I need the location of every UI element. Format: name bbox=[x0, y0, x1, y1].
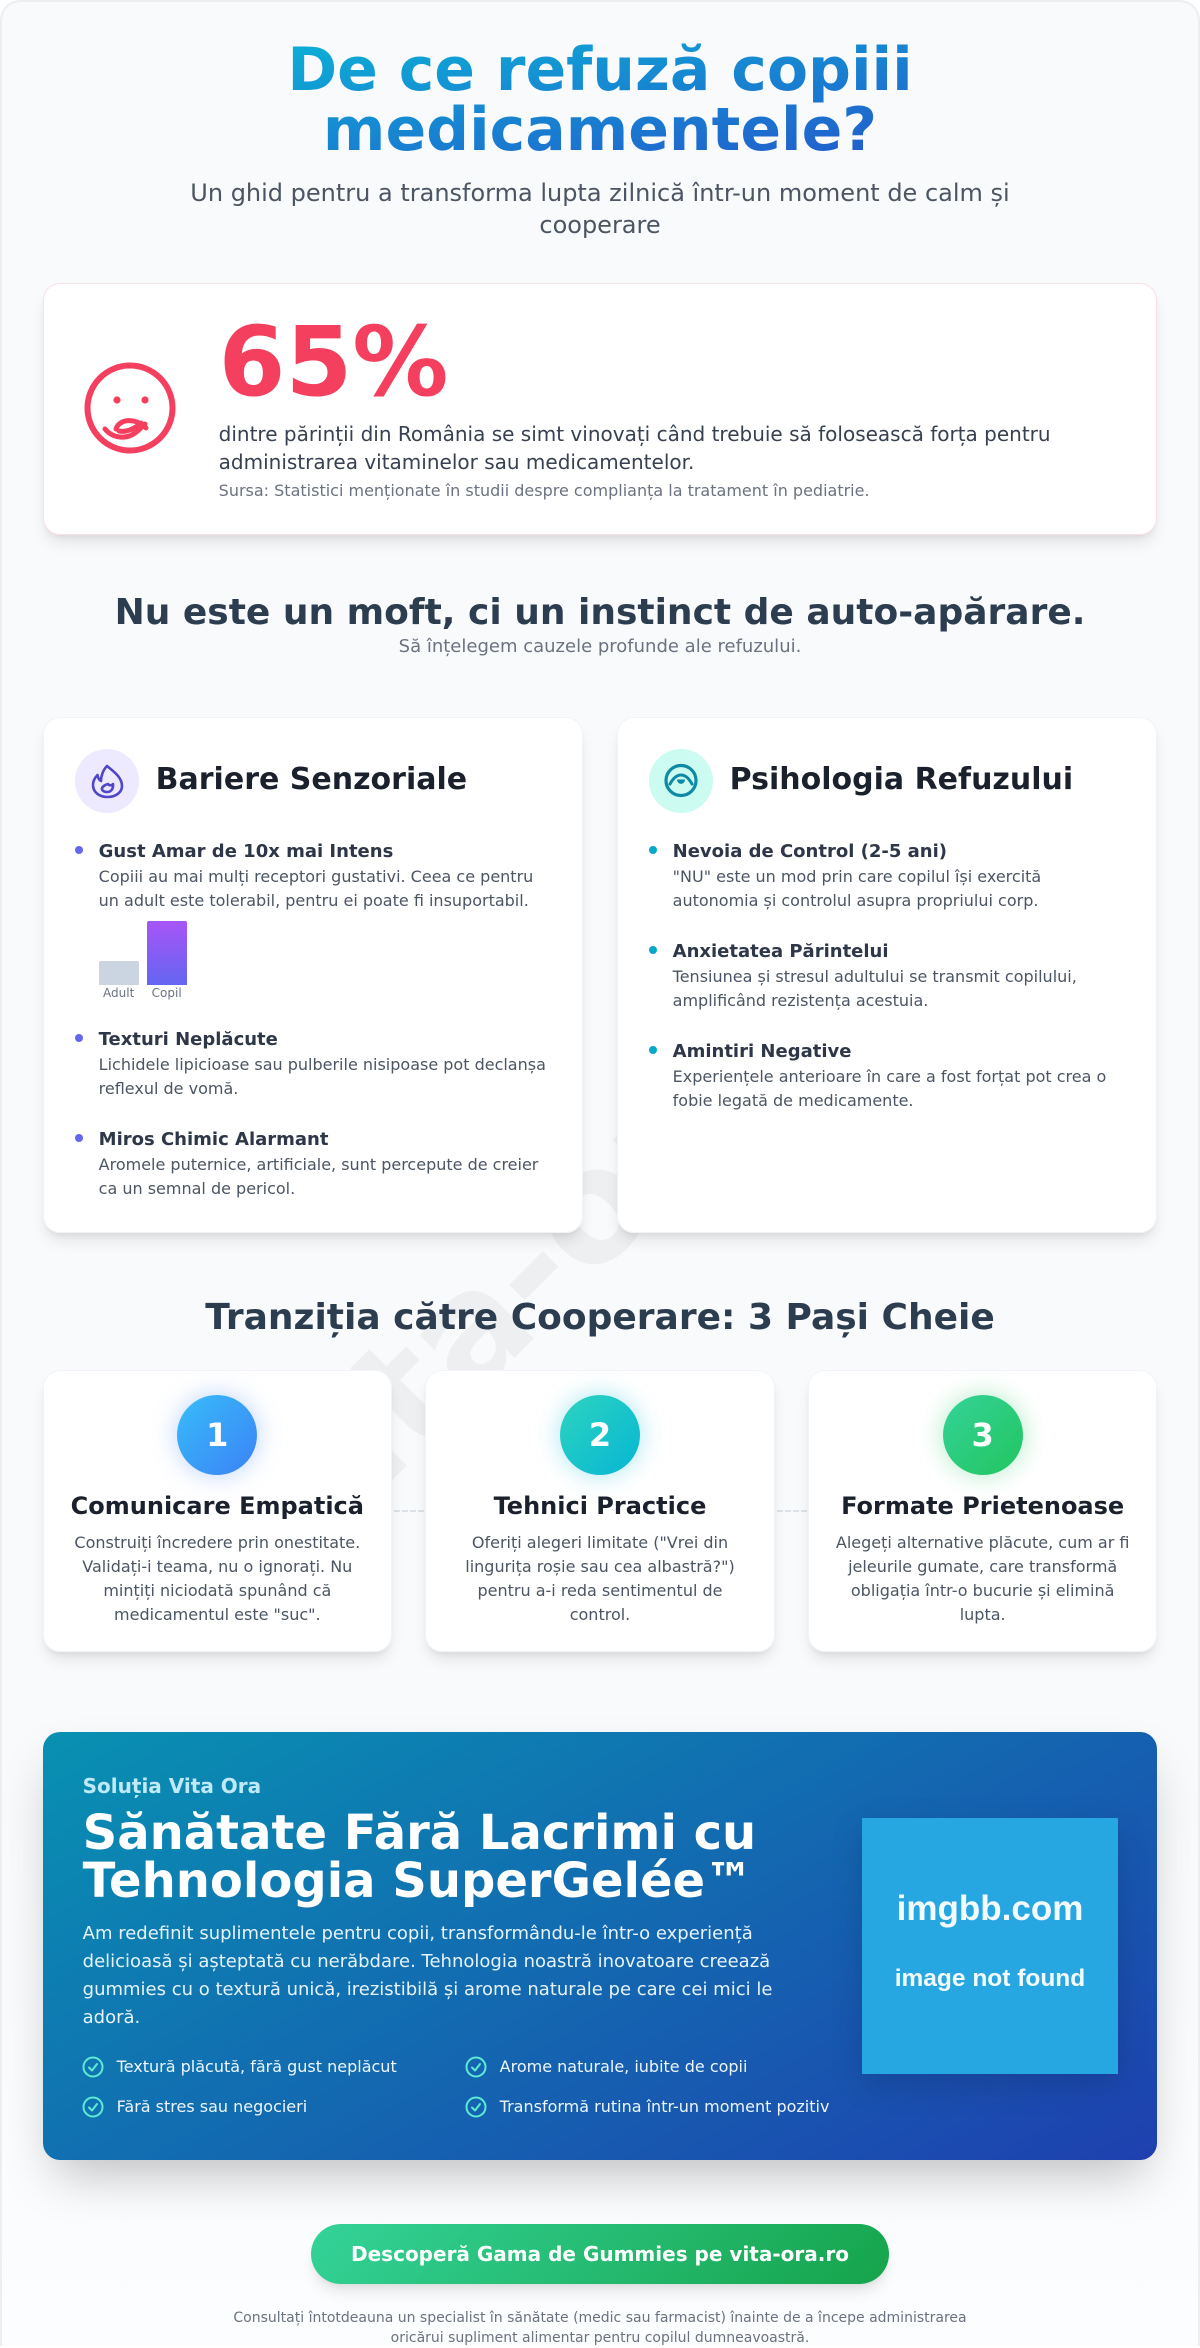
bullet: need for control bbox=[649, 841, 1041, 910]
step 1 card bbox=[43, 1370, 392, 1652]
subtitle: cooperare bbox=[539, 211, 661, 239]
feature: texture: Textură plăcută, fără gust neplăcut bbox=[117, 2057, 397, 2076]
bullet: textures: reflexul de vomă. bbox=[99, 1079, 238, 1098]
label: adult: Adult bbox=[103, 986, 134, 1000]
banner paragraph: Am redefinit suplimentele pentru copii, transformându-le într-o experiență bbox=[83, 1923, 753, 1944]
feature: natural flavours: Arome naturale, iubite de copii bbox=[500, 2057, 747, 2076]
step number: 2 bbox=[589, 1416, 611, 1454]
step text: jeleurile gumate, care transformă bbox=[848, 1557, 1117, 1576]
bullet: textures bbox=[75, 1029, 546, 1098]
panel: 65% statistic bbox=[43, 283, 1157, 535]
step text: Validați-i teama, nu o ignorați. Nu bbox=[82, 1557, 352, 1576]
step number bbox=[560, 1395, 640, 1475]
bullet: need for control: autonomia și controlul asupra propriului corp. bbox=[673, 891, 1038, 910]
step text: obligația într-o bucurie și elimină bbox=[851, 1581, 1114, 1600]
eyebrow label: Soluția Vita Ora bbox=[83, 1774, 261, 1798]
bar chart: adult vs child bbox=[99, 921, 187, 1000]
bullet: bitter taste: un adult este tolerabil, pentru ei poate fi insuportabil. bbox=[99, 891, 529, 910]
step number: 3 bbox=[972, 1416, 994, 1454]
bullet: bitter taste: Copiii au mai mulți receptori gustativi. Ceea ce pentru bbox=[99, 867, 533, 886]
section subheading: Să înțelegem cauzele profunde ale refuzului. bbox=[399, 636, 801, 657]
connector 2 bbox=[777, 1510, 807, 1512]
bullet: negative memories: Experiențele anterioare în care a fost forțat pot crea o bbox=[673, 1067, 1106, 1086]
feature: positive routine: Transformă rutina într-un moment pozitiv bbox=[500, 2097, 829, 2116]
step number: 1 bbox=[206, 1416, 228, 1454]
panel: sensory barriers bbox=[43, 717, 583, 1233]
connector 1 bbox=[394, 1510, 424, 1512]
image placeholder bbox=[862, 1818, 1118, 2074]
bullet: parent anxiety: amplificând rezistența acestuia. bbox=[673, 991, 928, 1010]
bullet: need for control: Nevoia de Control (2-5 ani) bbox=[673, 841, 947, 862]
icon: eye in circle bbox=[649, 749, 713, 813]
step text bbox=[465, 1533, 735, 1624]
step 2 card bbox=[425, 1370, 775, 1652]
call to action button: Descoperă Gama de Gummies pe vita-ora.ro bbox=[351, 2242, 849, 2266]
bullet: textures: Lichidele lipicioase sau pulberile nisipoase pot declanșa bbox=[99, 1055, 546, 1074]
bullet: negative memories: Amintiri Negative bbox=[673, 1041, 851, 1062]
bullet: chemical smell: Aromele puternice, artificiale, sunt percepute de creier bbox=[99, 1155, 538, 1174]
icon: flame bbox=[75, 749, 139, 813]
step text: pentru a-i reda sentimentul de bbox=[477, 1581, 722, 1600]
bullet: bitter taste bbox=[75, 841, 533, 1000]
bar: adult bbox=[99, 961, 139, 985]
disclaimer bbox=[233, 2310, 967, 2346]
step title: Comunicare Empatică bbox=[71, 1492, 364, 1520]
source note: Sursa: Statistici menționate în studii despre complianța la tratament în pediatrie. bbox=[219, 481, 870, 500]
title: De ce refuză copiii bbox=[287, 35, 913, 105]
disclaimer: Consultați întotdeauna un specialist în sănătate (medic sau farmacist) înainte de a începe administrarea bbox=[233, 2310, 967, 2326]
bullet: bitter taste: Gust Amar de 10x mai Intens bbox=[99, 841, 393, 862]
banner paragraph: delicioasă și așteptată cu nerăbdare. Tehnologia noastră inovatoare creează bbox=[83, 1951, 770, 1972]
section heading: transition: Tranziția către Cooperare: 3 Pași Cheie bbox=[205, 1297, 995, 1338]
title bbox=[287, 40, 913, 162]
step text: Alegeți alternative plăcute, cum ar fi bbox=[836, 1533, 1129, 1552]
bullet: chemical smell: Miros Chimic Alarmant bbox=[99, 1129, 328, 1150]
big number: 65% bbox=[219, 306, 448, 418]
step text: Construiți încredere prin onestitate. bbox=[74, 1533, 360, 1552]
statistic text: dintre părinții din România se simt vinovați când trebuie să folosească forța pentru bbox=[219, 422, 1051, 446]
bullet: parent anxiety bbox=[649, 941, 1077, 1010]
step text: lingurița roșie sau cea albastră?") bbox=[465, 1557, 735, 1576]
label: child: Copil bbox=[152, 986, 182, 1000]
banner heading bbox=[82, 1805, 756, 1909]
subtitle bbox=[190, 179, 1010, 239]
image placeholder: image not found bbox=[895, 1965, 1085, 1992]
step text: mințiți niciodată spunând că bbox=[103, 1581, 331, 1600]
image placeholder: imgbb.com bbox=[897, 1889, 1083, 1928]
call to action button bbox=[311, 2224, 889, 2284]
watermark: Vita-ora bbox=[194, 979, 817, 1603]
statistic text: administrarea vitaminelor sau medicamentelor. bbox=[219, 450, 694, 474]
step text: medicamentul este "suc". bbox=[114, 1605, 321, 1624]
bullet: negative memories bbox=[649, 1041, 1106, 1110]
bullet: parent anxiety: Anxietatea Părintelui bbox=[673, 941, 889, 962]
step text bbox=[836, 1533, 1129, 1624]
banner paragraph: adoră. bbox=[83, 2007, 140, 2028]
step text: control. bbox=[570, 1605, 630, 1624]
panel: Vita Ora solution bbox=[43, 1732, 1157, 2160]
step 3 card bbox=[808, 1370, 1157, 1652]
section heading: instinct: Nu este un moft, ci un instinct de auto-apărare. bbox=[115, 592, 1085, 633]
banner paragraph: gummies cu o textură unică, irezistibilă și arome naturale pe care cei mici le bbox=[83, 1979, 772, 2000]
step text: Oferiți alegeri limitate ("Vrei din bbox=[472, 1533, 728, 1552]
icon: grimacing face with tongue bbox=[84, 362, 176, 454]
panel: psychology of refusal bbox=[617, 717, 1157, 1233]
card title: Psihologia Refuzului bbox=[730, 762, 1073, 797]
card title: Bariere Senzoriale bbox=[156, 762, 467, 797]
step text: lupta. bbox=[960, 1605, 1006, 1624]
step text bbox=[74, 1533, 360, 1624]
bullet: negative memories: fobie legată de medicamente. bbox=[673, 1091, 914, 1110]
banner heading: Sănătate Fără Lacrimi cu bbox=[83, 1805, 756, 1861]
disclaimer: oricărui supliment alimentar pentru copilul dumneavoastră. bbox=[391, 2330, 809, 2346]
bullet: need for control: "NU" este un mod prin care copilul își exercită bbox=[673, 867, 1041, 886]
bullet: textures: Texturi Neplăcute bbox=[99, 1029, 278, 1050]
bullet: parent anxiety: Tensiunea și stresul adultului se transmit copilului, bbox=[673, 967, 1077, 986]
statistic text bbox=[219, 422, 1051, 474]
bullet: chemical smell bbox=[75, 1129, 538, 1198]
feature: no stress: Fără stres sau negocieri bbox=[117, 2097, 307, 2116]
step title: Formate Prietenoase bbox=[841, 1492, 1124, 1520]
step title: Tehnici Practice bbox=[494, 1492, 706, 1520]
step number bbox=[943, 1395, 1023, 1475]
subtitle: Un ghid pentru a transforma lupta zilnică într-un moment de calm și bbox=[190, 179, 1010, 207]
bar: child bbox=[147, 921, 187, 985]
step number bbox=[177, 1395, 257, 1475]
banner paragraph bbox=[82, 1923, 772, 2028]
bullet: chemical smell: ca un semnal de pericol. bbox=[99, 1179, 295, 1198]
banner heading: Tehnologia SuperGelée™ bbox=[83, 1853, 753, 1909]
title: medicamentele? bbox=[323, 95, 877, 165]
